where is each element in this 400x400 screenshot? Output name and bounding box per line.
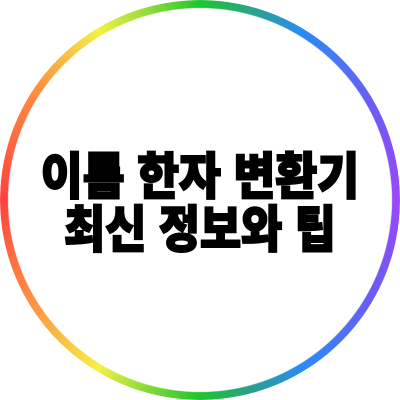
title line 1: 이름 한자 변환기 [41,149,359,205]
title line 2: 최신 정보와 팁 [64,202,336,258]
title [41,149,359,258]
